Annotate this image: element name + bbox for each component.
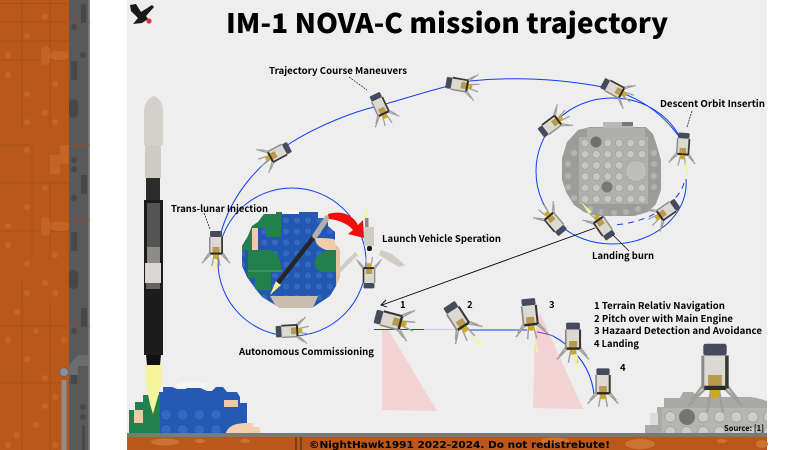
- label: trajectory course maneuvers: Trajectory Course Maneuvers: [269, 63, 407, 77]
- separated upper stage: [364, 205, 374, 251]
- powered descent path: [374, 330, 594, 394]
- lander: trajectory course maneuver: [363, 89, 401, 130]
- lander: lunar orbit lower left: [531, 199, 573, 241]
- engine flame: phase 2: [468, 332, 483, 346]
- lander: trans-lunar injection: [202, 231, 230, 266]
- sensor cone 1: [382, 329, 437, 411]
- leader line: trajectory course maneuvers: [349, 77, 367, 90]
- step number 4: 4: [620, 360, 626, 374]
- panel: moon surface base: [645, 392, 767, 433]
- leader line: descent orbit insertion: [687, 111, 692, 127]
- panel: main light-grey infographic background: [127, 0, 767, 450]
- lander: phase 3b: [557, 323, 589, 363]
- step number 2: 2: [467, 297, 473, 311]
- lander: phase 2: [435, 296, 484, 347]
- panel: moon: [562, 122, 661, 216]
- lander: coast one: [254, 135, 296, 174]
- lunar orbit: [536, 98, 686, 244]
- leader line: trans-lunar injection: [204, 213, 210, 229]
- rocket exhaust flame: [145, 365, 162, 414]
- engine flame: landing burn: [581, 202, 592, 214]
- engine flame: phase 3: [534, 332, 538, 352]
- source note: Source: [1]: [724, 423, 764, 434]
- panel: earth launch base: [129, 382, 261, 433]
- orbit around earth: [218, 188, 366, 336]
- engine flame: trans-lunar injection: [214, 261, 218, 276]
- text block: landing step list: 1 Terrain Relativ Navigation: [594, 298, 725, 312]
- label: trans-lunar injection: Trans-lunar Injection: [171, 201, 268, 215]
- title: IM-1 NOVA-C mission trajectory: [226, 2, 668, 41]
- label: landing burn: Landing burn: [592, 248, 654, 262]
- lander: autonomous commissioning: [275, 317, 310, 345]
- lander: separation: [356, 257, 382, 288]
- text block: landing step list: 2 Pitch over with Main Engine: [594, 311, 733, 325]
- lander: phase 1: [371, 301, 418, 342]
- sensor cone 2: [533, 313, 583, 409]
- panel: bottom orange strip: [127, 433, 768, 450]
- lander: lunar orbit left upper: [533, 103, 575, 144]
- rocket on launch pad: [144, 96, 163, 365]
- lander: near moon arrival: [596, 71, 638, 110]
- arrow: landing burn detail pointer: [381, 228, 595, 307]
- fairing halves: [337, 250, 405, 273]
- lander: descent orbit insertion: [668, 132, 697, 167]
- label: descent orbit insertion: Descent Orbit Insertin: [660, 96, 765, 110]
- lander: lunar orbit lower right: [643, 192, 685, 233]
- step number 1: 1: [400, 297, 406, 311]
- label: launch vehicle separation: Launch Vehicle Speration: [382, 231, 501, 245]
- panel: earth: [240, 210, 342, 310]
- lander: phase 3: [512, 297, 548, 340]
- engine flame: descent orbit insertion: [685, 161, 689, 175]
- text block: landing step list: 4 Landing: [594, 336, 639, 350]
- text block: landing step list: 3 Hazaard Detection and Avoidance: [594, 323, 762, 337]
- arrow: vehicle separation red arrow: [328, 213, 364, 238]
- lander: coast two: [444, 69, 481, 101]
- launch stage rising from earth: [270, 218, 327, 295]
- text block: landing step list: [594, 298, 762, 350]
- lander: landing burn: [581, 203, 622, 245]
- icon: hawk logo: [130, 4, 154, 24]
- descent dashed path: [612, 183, 684, 225]
- leader line: landing burn: [613, 235, 629, 251]
- engine flame: phase 3b: [574, 354, 578, 374]
- panel: left orange lego wall: [0, 0, 90, 450]
- label: autonomous commissioning: Autonomous Commissioning: [238, 344, 374, 358]
- trajectory from earth to moon: [220, 79, 680, 236]
- lander: phase 4: [588, 368, 618, 407]
- lander: touchdown large: [688, 344, 742, 412]
- step number 3: 3: [549, 297, 555, 311]
